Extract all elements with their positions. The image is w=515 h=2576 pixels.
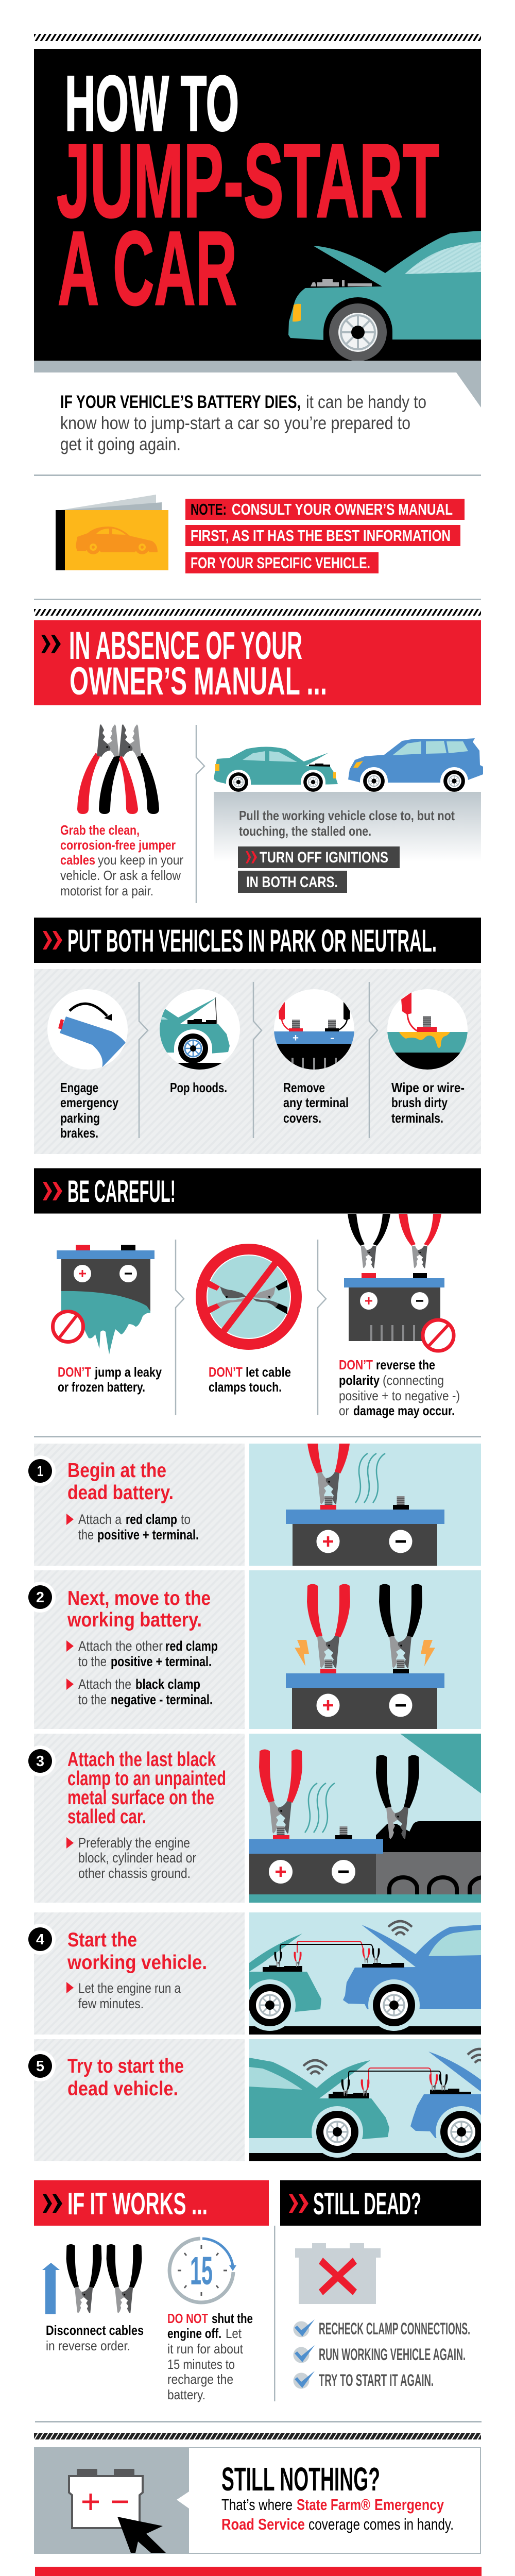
text: grab the clean cables: cables [60, 852, 95, 868]
intro text: get it going again. [60, 434, 181, 454]
heading: in absence of your owner's manual: OWNER’S MANUAL ... [70, 659, 327, 703]
badge: number 1 [25, 1455, 56, 1486]
text: grab the clean cables: you keep in your [98, 852, 183, 868]
badge: number 3 [25, 1745, 56, 1776]
text: remove covers [283, 1080, 349, 1126]
text: grab the clean cables: vehicle. Or ask a fellow [60, 868, 181, 883]
text: disconnect cables: in reverse order. [46, 2338, 130, 2353]
intro text: know how to jump-start a car so you’re prepared to [60, 413, 410, 433]
step 3 bullet: block, cylinder head or [78, 1850, 196, 1866]
heading: still dead: STILL DEAD? [313, 2187, 421, 2221]
step 5 heading: Try to start the [67, 2055, 184, 2077]
step 3 heading [67, 1749, 226, 1828]
text: do not shut the engine off: 15 minutes to [167, 2357, 235, 2372]
text: wipe terminals: Wipe or wire- [391, 1080, 465, 1095]
text: don't jump a leaky battery: or frozen battery. [58, 1379, 145, 1395]
badge: number 5: 5 [36, 2058, 44, 2075]
step 4 bullet: Let the engine run a [78, 1980, 181, 1996]
step 3 bullet [66, 1835, 196, 1881]
icon: clamps touching prohibited [201, 1249, 297, 1345]
step 3 bullet: other chassis ground. [78, 1866, 191, 1881]
band with speech tail [34, 361, 481, 408]
step 3 heading: metal surface on the [67, 1787, 214, 1809]
step 2 bullet: red clamp: positive + terminal. [111, 1654, 212, 1669]
step 1 bullet: the [78, 1527, 94, 1543]
illustration: dead battery with red clamp [286, 1444, 444, 1566]
badge: number 2: 2 [36, 1589, 44, 1606]
step 1 bullet [66, 1512, 199, 1543]
text: wipe terminals: terminals. [391, 1110, 443, 1126]
text: don't reverse polarity: DON’T [339, 1357, 373, 1372]
text: do not shut the engine off: it run for about [167, 2341, 244, 2357]
check item 2 [294, 2345, 466, 2364]
icon: prohibition sign [53, 1312, 83, 1342]
heading: still dead [280, 2180, 481, 2226]
illustration: last clamp on engine block [249, 1734, 497, 1903]
icon: up arrow [42, 2263, 60, 2314]
badge: number 2 [25, 1582, 56, 1613]
illustration: working battery with both clamps [286, 1584, 444, 1729]
panel: still nothing [34, 2447, 480, 2554]
text: remove covers: Remove [283, 1080, 325, 1095]
text: state farm road service: That’s where [221, 2496, 293, 2514]
badge: number 3: 3 [36, 1753, 44, 1770]
icon: open hood [160, 989, 240, 1073]
badge: number 1: 1 [37, 1463, 43, 1480]
text: state farm road service: Emergency [374, 2496, 444, 2514]
icon: 15 minute clock [169, 2239, 236, 2302]
text: don't reverse polarity: damage may occur. [353, 1403, 455, 1418]
text: disconnect cables [46, 2323, 144, 2353]
text: do not shut the engine off: shut the [212, 2311, 253, 2326]
text: don't reverse polarity: (connecting [383, 1372, 444, 1388]
text: engage brakes [60, 1080, 118, 1141]
step 5 [25, 2039, 491, 2161]
panel: hero title [34, 49, 481, 361]
top hatched band [34, 34, 481, 41]
note callout: FOR YOUR SPECIFIC VEHICLE. [191, 554, 370, 572]
step 1 heading: dead battery. [67, 1482, 174, 1504]
note callout: CONSULT YOUR OWNER’S MANUAL [232, 500, 453, 518]
check item 3: TRY TO START IT AGAIN. [319, 2371, 434, 2389]
step 1 heading: Begin at the [67, 1460, 166, 1482]
step 2 bullet: black clamp: Attach the [78, 1676, 131, 1692]
icon: battery with cursor [69, 2469, 166, 2553]
step 4 [25, 1912, 481, 2035]
checklist: still dead [294, 2319, 470, 2389]
text: grab the clean cables [60, 822, 183, 899]
step 1 bullet: positive + terminal. [97, 1527, 199, 1543]
heading: if it works [34, 2180, 269, 2226]
badge: number 4 [25, 1924, 56, 1955]
step 2 heading [67, 1587, 211, 1631]
step 2 bullet: red clamp [66, 1638, 218, 1669]
icon: 15 minute clock: 15 [190, 2249, 213, 2293]
step 5 heading [67, 2055, 184, 2100]
text: engage brakes: brakes. [60, 1125, 98, 1141]
icon: reversed polarity battery [344, 1214, 454, 1351]
step 5 heading: dead vehicle. [67, 2078, 178, 2100]
text: state farm road service: State Farm® [297, 2496, 370, 2514]
text: don't reverse polarity: reverse the [376, 1357, 435, 1372]
text: don't reverse polarity: or [339, 1403, 349, 1418]
text: don't let cable clamps touch [209, 1364, 291, 1395]
text: don't let cable clamps touch: clamps touch. [209, 1379, 282, 1395]
step 3 heading: Attach the last black [67, 1749, 216, 1771]
icon: disconnected clamps [66, 2244, 142, 2313]
red footer bar [35, 2567, 482, 2576]
text: grab the clean cables: Grab the clean, [60, 822, 140, 838]
text: do not shut the engine off [167, 2311, 253, 2402]
text: don't jump a leaky battery [58, 1364, 162, 1395]
step 3 bullet: Preferably the engine [78, 1835, 190, 1851]
text: pop hoods: Pop hoods. [170, 1080, 227, 1095]
text: don't reverse polarity: polarity [339, 1372, 380, 1388]
icon: dead battery with x [295, 2243, 381, 2304]
text: don't reverse polarity [339, 1357, 460, 1418]
step 2 heading: Next, move to the [67, 1587, 211, 1609]
text: do not shut the engine off: engine off. [167, 2326, 221, 2341]
title: how to: HOW TO [65, 60, 239, 147]
step 4 heading: working vehicle. [67, 1952, 207, 1974]
step 4 bullet [66, 1980, 181, 2011]
icon: leaky frozen battery [53, 1245, 154, 1354]
text: state farm road service: Road Service [221, 2515, 305, 2533]
panel: prepare vehicles [34, 969, 481, 1154]
badge: number 4: 4 [36, 1931, 44, 1948]
step 1 heading [67, 1460, 174, 1504]
text: do not shut the engine off: DO NOT [167, 2311, 208, 2326]
text: don't let cable clamps touch: let cable [246, 1364, 291, 1380]
text: engage brakes: emergency [60, 1095, 118, 1110]
step 4 bullet: few minutes. [78, 1996, 144, 2011]
text: engage brakes: Engage [60, 1080, 98, 1095]
heading: in absence of your owner's manual [34, 620, 481, 705]
panel: pull the working vehicle: Pull the working vehicle close to, but not [239, 808, 455, 823]
step 1 bullet: red clamp [126, 1512, 177, 1527]
step 4 heading [67, 1929, 207, 1974]
step 3 heading: clamp to an unpainted [67, 1768, 226, 1790]
intro text [60, 392, 426, 454]
text: disconnect cables: Disconnect cables [46, 2323, 144, 2338]
heading: in absence of your owner's manual: IN ABSENCE OF YOUR [69, 624, 302, 668]
badge: number 5 [25, 2050, 56, 2081]
text: grab the clean cables: motorist for a pair. [60, 883, 153, 899]
note callout [185, 499, 465, 573]
intro text: IF YOUR VEHICLE’S BATTERY DIES, [60, 392, 301, 412]
note callout: FIRST, AS IT HAS THE BEST INFORMATION [191, 527, 451, 545]
text: do not shut the engine off: battery. [167, 2387, 205, 2402]
icon: dirty terminals [387, 989, 468, 1071]
icon: terminal covers: - [330, 1032, 335, 1044]
icon: prohibition sign [423, 1320, 454, 1351]
text: grab the clean cables: corrosion-free jumper [60, 837, 176, 853]
title: a car: A CAR [58, 210, 237, 327]
step 2 bullet: red clamp: Attach the other [78, 1638, 163, 1654]
step 4 heading: Start the [67, 1929, 137, 1951]
step 1 bullet: to [181, 1512, 191, 1527]
step 3 heading: stalled car. [67, 1806, 146, 1828]
check item 3 [294, 2371, 434, 2389]
text: do not shut the engine off: Let [226, 2326, 242, 2341]
text: still nothing: STILL NOTHING? [221, 2461, 380, 2498]
text: wipe terminals [391, 1080, 465, 1126]
panel: pull the working vehicle: IN BOTH CARS. [246, 874, 338, 891]
heading: put both vehicles in park or neutral [34, 918, 481, 963]
text: remove covers: any terminal [283, 1095, 349, 1110]
step 3 [25, 1734, 497, 1903]
step 2 heading: working battery. [67, 1609, 202, 1631]
text: don't jump a leaky battery: jump a leaky [94, 1364, 162, 1380]
intro text: it can be handy to [306, 392, 426, 412]
icon: terminal covers: + [293, 1032, 299, 1044]
text: don't let cable clamps touch: DON’T [209, 1364, 243, 1380]
text: engage brakes: parking [60, 1110, 100, 1126]
step 2 bullet: red clamp: red clamp [165, 1638, 218, 1654]
heading: be careful [34, 1168, 481, 1214]
text: wipe terminals: brush dirty [391, 1095, 448, 1110]
check item 1 [294, 2319, 470, 2338]
text: don't jump a leaky battery: DON’T [58, 1364, 91, 1380]
step 2 bullet: black clamp: negative - terminal. [111, 1692, 213, 1707]
heading: be careful: BE CAREFUL! [67, 1174, 176, 1209]
text: do not shut the engine off: recharge the [167, 2371, 233, 2387]
illustration: cars connected, trying dead vehicle [249, 2049, 491, 2161]
panel: pull the working vehicle: touching, the stalled one. [239, 823, 371, 839]
panel: pull the working vehicle: TURN OFF IGNITIONS [260, 849, 388, 866]
step 1 [28, 1444, 481, 1566]
panel: pull the working vehicle [214, 792, 481, 893]
illustration: cars connected, working vehicle running [244, 1921, 481, 2035]
text: remove covers: covers. [283, 1110, 321, 1126]
icon: owner's manual [56, 495, 168, 570]
icon: jumper cable clamps [77, 724, 159, 814]
step 1 bullet: Attach a [78, 1512, 122, 1527]
text: state farm road service: coverage comes in handy. [308, 2515, 454, 2533]
step 2 bullet: black clamp [66, 1676, 213, 1707]
icon: parking brake [47, 989, 128, 1070]
text: state farm road service [221, 2496, 454, 2533]
step 2 bullet: black clamp: to the [78, 1692, 107, 1707]
illustration: blue SUV [348, 738, 483, 792]
icon: terminal covers [274, 989, 354, 1071]
heading: if it works: IF IT WORKS ... [67, 2187, 208, 2221]
text: don't reverse polarity: positive + to negative -) [339, 1388, 460, 1403]
step 2 bullet: red clamp: to the [78, 1654, 107, 1669]
illustration: teal sedan [214, 747, 338, 792]
note callout: NOTE: [191, 500, 227, 518]
step 2 [25, 1570, 481, 1729]
illustration: teal car with open hood [288, 231, 481, 361]
step 2 bullet: black clamp: black clamp [135, 1676, 200, 1692]
